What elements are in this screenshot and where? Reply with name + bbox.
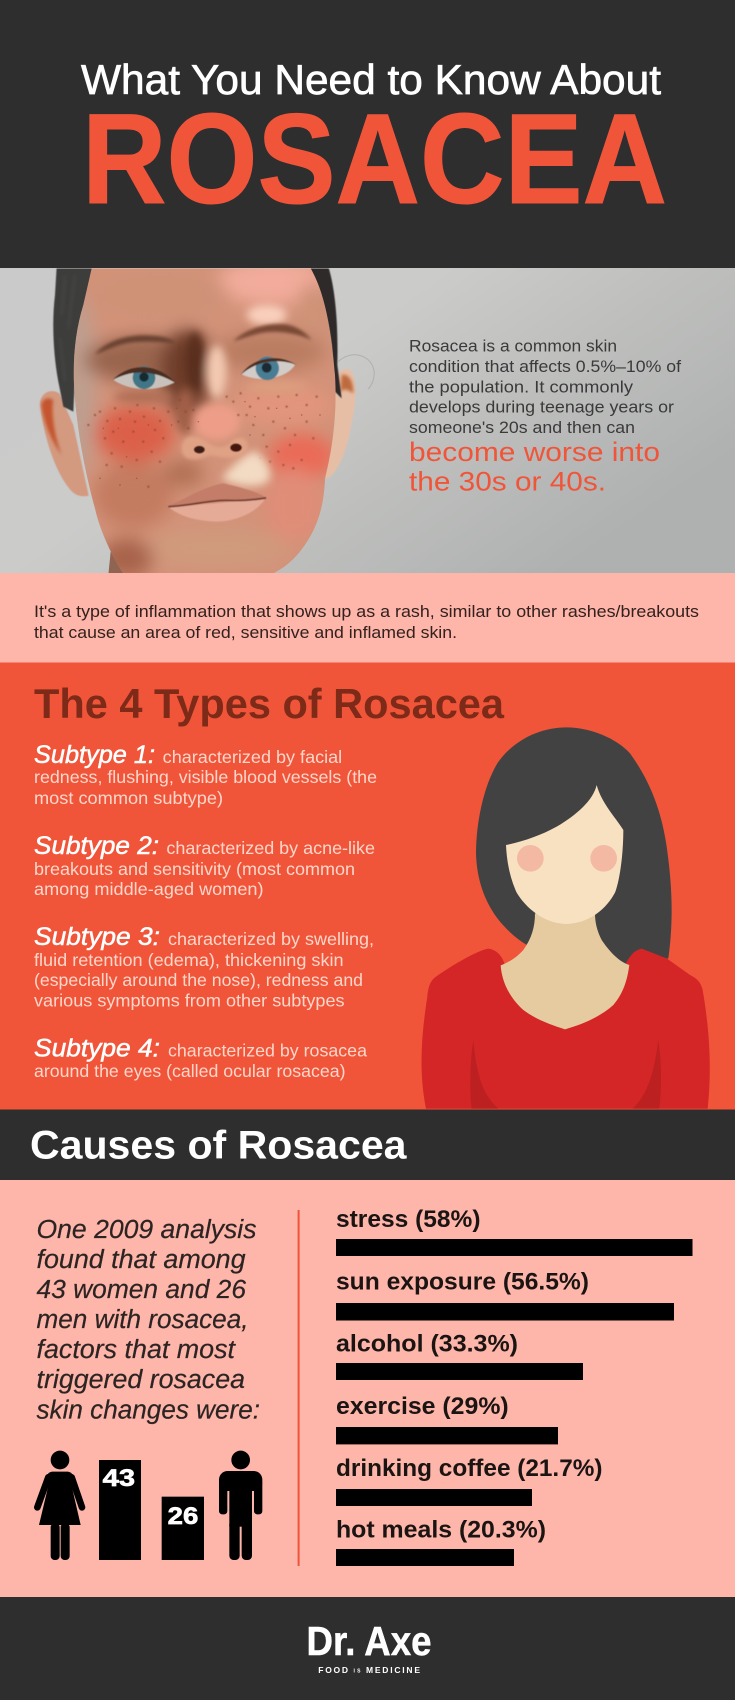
- panel: causes: [0, 1180, 735, 1597]
- subtype 3: [34, 923, 374, 1010]
- note text: [34, 602, 699, 642]
- subtype 3: fluid retention (edema), thickening skin: [34, 950, 344, 970]
- eye left: [113, 366, 176, 389]
- philtrum highlight: [222, 451, 270, 486]
- icon: man: [219, 1451, 262, 1560]
- bar: women 43: [99, 1460, 141, 1560]
- intro text: the population. It commonly: [409, 377, 634, 396]
- intro highlight text: [409, 437, 660, 497]
- intro highlight text: the 30s or 40s.: [409, 467, 606, 497]
- face: [506, 785, 623, 924]
- subtype 1: most common subtype): [34, 788, 223, 808]
- freckles: [88, 393, 317, 487]
- title line: What You Need to Know About: [81, 56, 661, 103]
- bar: stress: [336, 1206, 692, 1256]
- panel: causes heading: [0, 1110, 735, 1180]
- bar: hot meals: [336, 1516, 546, 1566]
- illustration: woman with flushed cheeks: [422, 727, 710, 1109]
- logo: Dr. Axe: Dr. Axe: [306, 1618, 432, 1664]
- subtype 1: redness, flushing, visible blood vessels (the: [34, 767, 377, 787]
- pictogram: 43 women vs 26 men: [37, 1451, 262, 1560]
- nose: [182, 436, 248, 459]
- analysis text: [36, 1216, 260, 1424]
- bar: drinking coffee: [336, 1455, 602, 1506]
- flyaway hair: [338, 355, 374, 389]
- bar chart: triggers: [336, 1206, 692, 1566]
- logo: Dr. Axe: FOOD: [318, 1665, 348, 1675]
- ear left: [40, 391, 89, 496]
- intro highlight text: become worse into: [409, 437, 660, 467]
- note text: that cause an area of red, sensitive and inflamed skin.: [34, 623, 457, 642]
- intro text: someone's 20s and then can: [409, 418, 635, 437]
- analysis text: triggered rosacea: [36, 1366, 245, 1394]
- note text: It's a type of inflammation that shows up as a rash, similar to other rashes/breakouts: [34, 602, 699, 621]
- logo: Dr. Axe: IS: [354, 1668, 361, 1674]
- bar: men 26: 26: [168, 1503, 198, 1530]
- eye right: [241, 357, 297, 380]
- analysis text: 43 women and 26: [36, 1276, 247, 1304]
- hair: [52, 268, 92, 412]
- sweater shadows: [470, 1040, 661, 1109]
- subtype 4: around the eyes (called ocular rosacea): [34, 1061, 346, 1081]
- ear right: [322, 369, 355, 479]
- heading: 4 types: The 4 Types of Rosacea: [34, 680, 505, 727]
- panel: title header: [0, 0, 735, 269]
- panel: photo intro: [0, 258, 735, 582]
- bar: exercise: exercise (29%): [336, 1393, 509, 1420]
- analysis text: men with rosacea,: [36, 1306, 248, 1334]
- subtype 4: [34, 1034, 367, 1081]
- subtype 3: Subtype 3:: [34, 923, 160, 951]
- subtype 1: [34, 741, 377, 808]
- intro text: develops during teenage years or: [409, 398, 674, 416]
- intro text: Rosacea is a common skin: [409, 336, 617, 355]
- bar: drinking coffee: drinking coffee (21.7%): [336, 1455, 602, 1482]
- bar: women 43: 43: [103, 1465, 135, 1492]
- lips: [168, 483, 266, 522]
- subtype 2: characterized by acne-like: [166, 838, 375, 858]
- hair: [476, 727, 672, 965]
- subtype 2: breakouts and sensitivity (most common: [34, 859, 355, 879]
- subtype 3: characterized by swelling,: [168, 929, 374, 949]
- title: rosacea: ROSACEA: [82, 88, 667, 231]
- subtype 4: characterized by rosacea: [168, 1040, 367, 1060]
- heading: causes: Causes of Rosacea: [30, 1124, 407, 1168]
- subtype 2: among middle-aged women): [34, 879, 264, 899]
- intro text: condition that affects 0.5%–10% of: [409, 357, 681, 376]
- bar: hot meals: hot meals (20.3%): [336, 1516, 546, 1543]
- panel: inflammation note: [0, 573, 735, 663]
- bar: sun exposure: sun exposure (56.5%): [336, 1268, 589, 1295]
- cheek right: [590, 845, 617, 872]
- photo: woman's face with rosacea: [40, 258, 374, 582]
- cheek left: [517, 845, 544, 872]
- panel: footer: [0, 1597, 735, 1700]
- icon: woman: [37, 1451, 82, 1560]
- intro text: [409, 336, 681, 437]
- subtype 3: (especially around the nose), redness and: [34, 970, 363, 990]
- bar: exercise: [336, 1393, 558, 1444]
- divider: [298, 1210, 300, 1566]
- logo: Dr. Axe: MEDICINE: [366, 1665, 420, 1675]
- subtype 2: Subtype 2:: [34, 832, 159, 860]
- panel: the 4 types: [0, 662, 735, 1110]
- analysis text: factors that most: [36, 1336, 236, 1364]
- bar: men 26: [162, 1497, 204, 1560]
- face skin: [74, 268, 336, 573]
- neck: [501, 913, 629, 1029]
- analysis text: found that among: [36, 1246, 246, 1274]
- subtype 1: Subtype 1:: [34, 741, 155, 769]
- subtype 2: [34, 832, 375, 899]
- analysis text: skin changes were:: [36, 1396, 260, 1424]
- bar: stress: stress (58%): [336, 1206, 480, 1233]
- subtype 1: characterized by facial: [163, 747, 342, 767]
- subtype 3: various symptoms from other subtypes: [34, 990, 345, 1010]
- bar: sun exposure: [336, 1268, 674, 1320]
- bar: alcohol: [336, 1330, 583, 1380]
- analysis text: One 2009 analysis: [36, 1216, 257, 1244]
- bar: alcohol: alcohol (33.3%): [336, 1330, 518, 1357]
- eyebrow left: [95, 335, 176, 354]
- sweater: [422, 949, 710, 1109]
- subtype 4: Subtype 4:: [34, 1034, 160, 1062]
- eyebrow right: [233, 324, 312, 341]
